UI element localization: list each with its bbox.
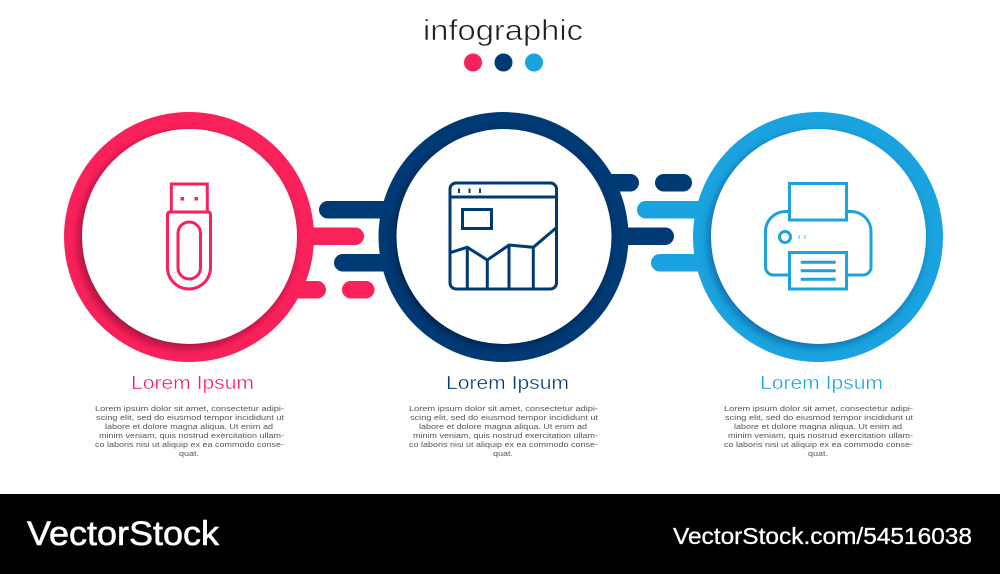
footer image id: VectorStock.com/54516038 [673, 523, 972, 549]
heading: column 3: Lorem Ipsum [760, 373, 883, 393]
text block: column 1: labore et dolore magna aliqua. Ut enim ad [105, 422, 273, 431]
title: infographic [423, 15, 583, 47]
text block: column 2 [409, 404, 599, 458]
text block: column 3: labore et dolore magna aliqua. Ut enim ad [734, 422, 902, 431]
text block: column 3 [724, 404, 914, 458]
icon: printer [766, 184, 871, 289]
text block: column 2: Lorem ipsum dolor sit amet, consectetur adipi- [409, 404, 599, 413]
text block: column 3: scing elit, sed do eiusmod tempor incididunt ut [725, 413, 914, 422]
text block: column 1: minim veniam, quis nostrud exercitation ullam- [99, 431, 285, 440]
heading: column 2: Lorem Ipsum [446, 373, 569, 393]
legend dots [464, 54, 543, 72]
footer brand: VectorStock [27, 515, 220, 553]
text block: column 2: minim veniam, quis nostrud exercitation ullam- [413, 431, 599, 440]
text block: column 2: co laboris nisi ut aliquip ex ea commodo conse- [409, 440, 599, 449]
text block: column 3: minim veniam, quis nostrud exercitation ullam- [728, 431, 914, 440]
text block: column 1: co laboris nisi ut aliquip ex ea commodo conse- [95, 440, 285, 449]
icon: usb flash drive [168, 184, 210, 289]
panel: pink circle [64, 112, 314, 362]
icon: browser window with chart [450, 183, 556, 289]
connector bars: pink [280, 228, 374, 298]
panel: blue circle [693, 112, 943, 362]
text block: column 3: co laboris nisi ut aliquip ex ea commodo conse- [724, 440, 914, 449]
heading: column 1: Lorem Ipsum [131, 373, 254, 393]
text block: column 3: Lorem ipsum dolor sit amet, consectetur adipi- [724, 404, 914, 413]
text block: column 1 [95, 404, 285, 458]
text block: column 3: quat. [808, 449, 828, 458]
connector bars: blue [637, 201, 717, 272]
panel: navy circle [378, 112, 628, 362]
text block: column 1: quat. [179, 449, 199, 458]
text block: column 2: labore et dolore magna aliqua. Ut enim ad [419, 422, 587, 431]
footer band [0, 494, 1000, 574]
text block: column 2: quat. [493, 449, 513, 458]
text block: column 1: scing elit, sed do eiusmod tempor incididunt ut [96, 413, 285, 422]
text block: column 1: Lorem ipsum dolor sit amet, consectetur adipi- [95, 404, 285, 413]
connector bars: navy [319, 174, 692, 272]
text block: column 2: scing elit, sed do eiusmod tempor incididunt ut [410, 413, 599, 422]
